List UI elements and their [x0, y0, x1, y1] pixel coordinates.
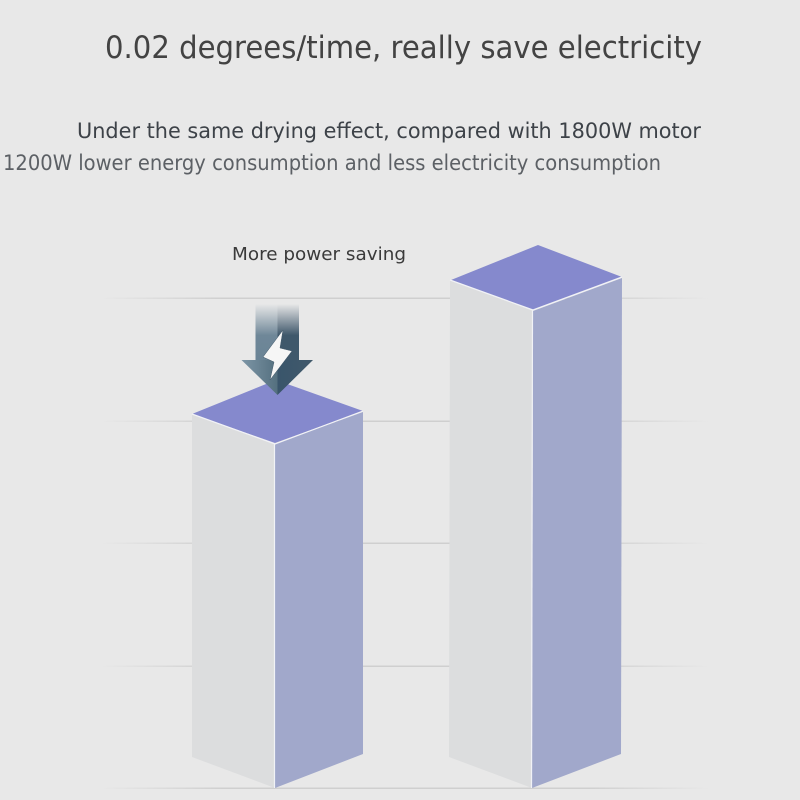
- subtitle line 2: 1200W lower energy consumption and less electricity consumption: [3, 151, 661, 176]
- icon: down arrow with lightning bolt: [242, 304, 313, 395]
- chart grid lines: [100, 298, 710, 789]
- subtitle line 1: Under the same drying effect, compared with 1800W motor: [77, 119, 701, 144]
- icon: lightning bolt: [263, 330, 292, 380]
- bar: 1800W motor: [449, 245, 622, 788]
- label: more power saving: More power saving: [232, 244, 406, 265]
- title: 0.02 degrees/time, really save electricity: [105, 30, 702, 66]
- bar: 1200W motor: [192, 380, 363, 788]
